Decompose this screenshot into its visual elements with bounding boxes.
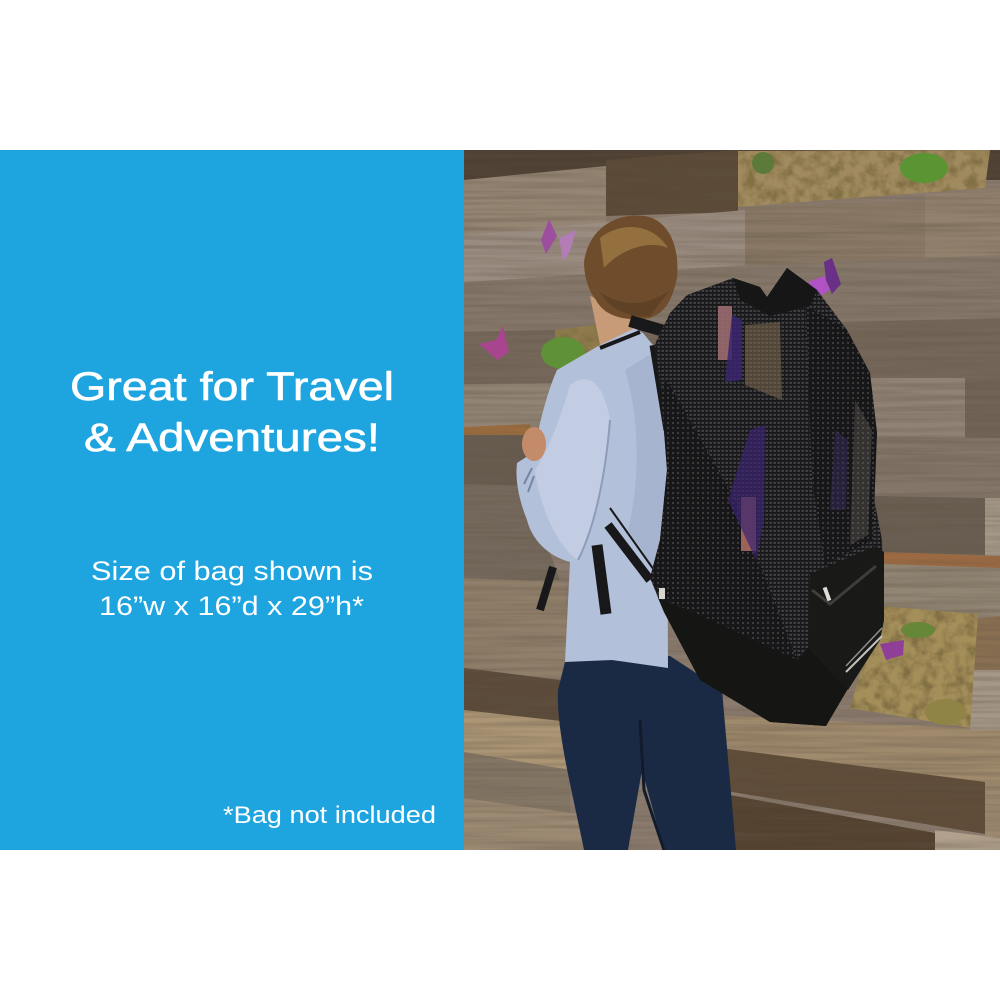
photo: person wearing mesh backpack against wood wall — [464, 150, 1000, 850]
solid black base — [658, 598, 880, 726]
heading: Great for Travel — [70, 365, 394, 409]
right mesh gusset — [806, 305, 877, 565]
shoulder and lower straps — [540, 321, 668, 614]
hand — [522, 427, 546, 461]
shirt — [516, 322, 668, 668]
side mesh panel — [650, 380, 797, 660]
neck and hair — [584, 215, 677, 345]
top cinch — [733, 268, 817, 316]
size text — [91, 556, 373, 621]
trousers — [558, 650, 736, 850]
bag contents seen through mesh — [718, 306, 732, 360]
mesh backpack — [650, 268, 884, 726]
moss planter bottom right — [850, 606, 978, 728]
moss planter behind person — [541, 324, 600, 369]
blue text panel — [0, 150, 464, 850]
size text: 16”w x 16”d x 29”h* — [99, 591, 365, 621]
size text: Size of bag shown is — [91, 556, 373, 586]
moss planter top right — [738, 150, 990, 207]
wood plank wall — [464, 150, 1000, 850]
front pocket — [808, 546, 884, 690]
heading — [70, 365, 394, 460]
heading: & Adventures! — [84, 416, 380, 460]
footnote: *Bag not included — [223, 802, 436, 829]
butterflies — [479, 219, 904, 660]
